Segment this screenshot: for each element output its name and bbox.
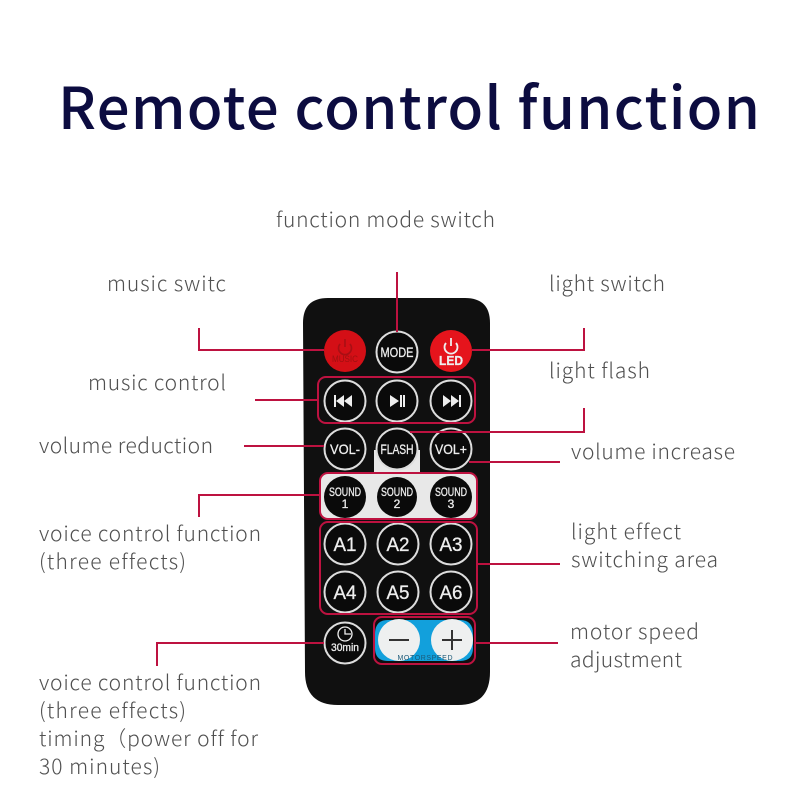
title: Remote control function [58, 62, 760, 146]
button: mode [376, 332, 418, 372]
label: light effect switching area: light effect [571, 516, 682, 546]
button: sound 3: SOUND [435, 485, 467, 499]
button: a4 [324, 572, 366, 612]
label: timing [39, 667, 261, 781]
button: a5: A5 [386, 583, 410, 604]
button: a1: A1 [334, 535, 356, 556]
label: light effect switching area: switching area [571, 544, 718, 574]
label: light switch: light switch [549, 268, 665, 298]
button: sound 1: 1 [342, 497, 349, 511]
button: vol+: VOL+ [435, 441, 467, 457]
label: motor speed adjustment [570, 616, 699, 674]
button: a6: A6 [440, 583, 462, 604]
white print strips [320, 450, 477, 519]
button: sound 3 [430, 476, 472, 518]
label: light flash: light flash [549, 355, 650, 385]
label: voice control function: (three effects) [39, 546, 186, 576]
motor speed panel: MOTORSPEED [398, 655, 452, 662]
motor speed panel [375, 619, 473, 662]
button: 30min timer: 30min [331, 642, 359, 654]
button: a3: A3 [440, 535, 462, 556]
button: vol+ [430, 428, 472, 470]
button: sound 1: SOUND [329, 485, 361, 499]
label: timing: timing（power off for [39, 723, 258, 753]
button: music: MUSIC [332, 354, 358, 364]
button: a3 [430, 524, 472, 564]
label: music control: music control [88, 367, 226, 397]
button: sound 2: 2 [394, 497, 401, 511]
button: led [430, 330, 472, 372]
button: music [324, 330, 366, 372]
button: a5 [378, 572, 418, 612]
button: vol- [324, 428, 366, 470]
button: a4: A4 [334, 583, 357, 604]
label: volume reduction: volume reduction [39, 430, 213, 460]
button: mode: MODE [380, 344, 414, 360]
button: sound 3: 3 [448, 497, 455, 511]
button: play/pause [376, 380, 418, 422]
button: sound 2 [377, 477, 417, 517]
button: a2: A2 [386, 535, 410, 556]
label: timing: voice control function [39, 667, 261, 697]
button: flash [376, 428, 418, 470]
label: function mode switch: function mode switch [276, 204, 495, 234]
button: a2 [378, 524, 418, 564]
remote control [303, 298, 490, 705]
button: a1 [324, 524, 366, 564]
label: voice control function: voice control function [39, 518, 261, 548]
remote body [303, 298, 490, 705]
label: motor speed adjustment: adjustment [570, 644, 683, 674]
label: motor speed adjustment: motor speed [570, 616, 699, 646]
red outline boxes [318, 377, 477, 664]
button: vol-: VOL- [330, 441, 360, 457]
button: previous [324, 380, 366, 422]
label: light effect switching area [571, 516, 718, 574]
label: timing: (three effects) [39, 695, 186, 725]
label: voice control function [39, 518, 261, 576]
callout lines [157, 272, 584, 666]
label: timing: 30 minutes) [39, 751, 160, 781]
button: 30min timer [324, 622, 366, 664]
button: led: LED [439, 353, 463, 368]
button: next [430, 380, 472, 422]
button: a6 [430, 572, 472, 612]
button: sound 2: SOUND [381, 485, 413, 499]
label: volume increase: volume increase [571, 436, 735, 466]
button: flash: FLASH [380, 441, 414, 457]
button: sound 1 [324, 476, 366, 518]
label: music switc: music switc [107, 268, 226, 298]
